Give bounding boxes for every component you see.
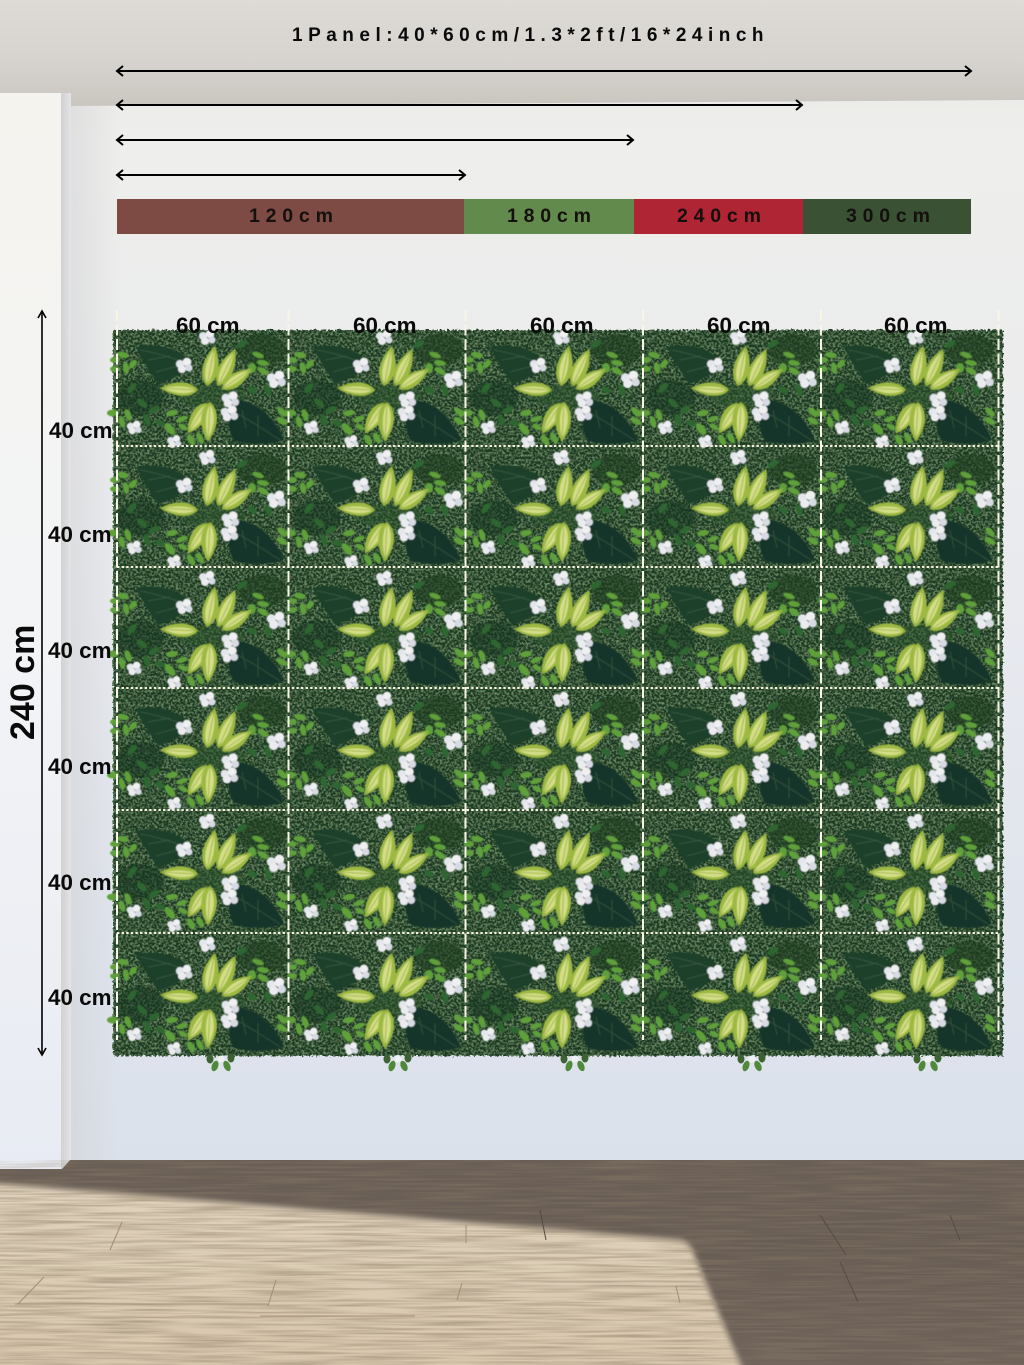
dashed guides: rows [117,446,1000,933]
panel row 5 [107,814,997,932]
height labels: 40 cm: 40 cm [48,985,112,1010]
width legend bar [117,199,971,234]
height labels: 40 cm: 40 cm [48,522,112,547]
segment: 120cm: 120cm [249,205,339,227]
panel row 4 [107,692,997,810]
width labels: 60 cm: 60 cm [530,313,594,338]
segment: 300cm [803,199,971,234]
width labels: 60 cm: 60 cm [353,313,416,338]
green wall: 5 x 6 panels [107,330,1003,1072]
background: ceiling [0,0,1024,106]
segment: 180cm: 180cm [507,205,597,227]
segment: 240cm [634,199,803,234]
height arrow: 240 cm [38,311,46,1055]
width labels: 60 cm [176,313,948,338]
arrow: 180 cm width [117,135,633,145]
arrow: 300 cm width [117,66,971,76]
height labels: 40 cm: 40 cm [48,638,112,663]
wall shadow beside pillar [70,100,120,1160]
background: pillar [0,93,71,1169]
segment: 180cm [464,199,634,234]
wooden floor [0,1160,1024,1365]
height labels: 40 cm: 40 cm [48,870,112,895]
width labels: 60 cm: 60 cm [176,313,240,338]
top heading: panel size: 1Panel:40*60cm/1.3*2ft/16*24inch [292,25,769,46]
panel row 3 [107,571,997,689]
panel row 1 [107,330,997,448]
height labels: 40 cm: 40 cm [48,754,112,779]
arrow: 120 cm width [117,170,465,180]
width labels: 60 cm: 60 cm [884,313,948,338]
height labels: 40 cm: 40 cm [49,418,112,443]
height label: 240 cm: 240 cm [4,625,42,740]
width labels: 60 cm: 60 cm [707,313,770,338]
dashed guides: columns [117,310,998,1040]
arrow: 240 cm width [117,100,802,110]
panel row 6 [107,937,997,1055]
segment: 300cm: 300cm [846,205,936,227]
panel row 2 [107,450,997,568]
hanging leaves [206,1054,942,1072]
height labels: 40 cm [48,418,112,1010]
segment: 240cm: 240cm [677,205,767,227]
hedge backing [113,330,1003,1056]
segment: 120cm [117,199,464,234]
